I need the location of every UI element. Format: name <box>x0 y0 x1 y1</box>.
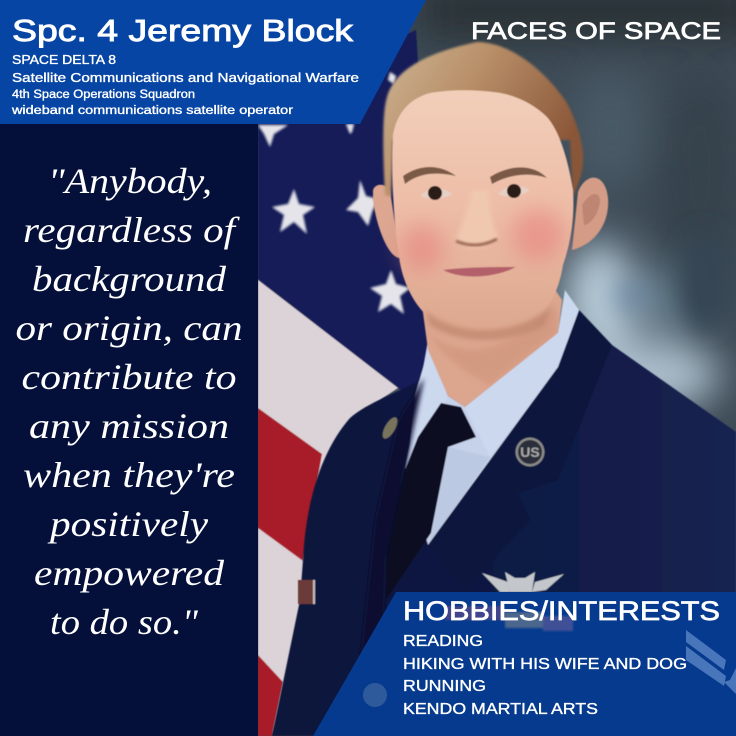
chin shadow <box>425 305 552 340</box>
quote text <box>16 161 242 642</box>
quote text: any mission <box>29 406 229 446</box>
quote text: "Anybody, <box>48 161 212 201</box>
unit details: SPACE DELTA 8 <box>12 53 116 67</box>
eyebrows <box>403 167 456 184</box>
eyes <box>420 188 452 199</box>
portrait: airman in service dress <box>272 42 736 736</box>
panel: quote <box>0 124 258 736</box>
name heading: Spc. 4 Jeremy Block <box>12 13 354 48</box>
hobbies list: RUNNING <box>403 678 486 695</box>
faded ribbon rack <box>445 606 573 631</box>
hobbies heading: HOBBIES/INTERESTS <box>403 596 720 626</box>
faded rank star <box>724 668 736 694</box>
flag stars <box>258 72 410 314</box>
quote text: or origin, can <box>16 308 242 348</box>
quote text: positively <box>47 504 208 544</box>
hobbies list: HIKING WITH HIS WIFE AND DOG <box>403 656 687 673</box>
cheeks <box>400 209 564 272</box>
quote text: empowered <box>34 553 225 593</box>
hair <box>383 42 583 197</box>
collar brass <box>516 438 544 466</box>
faded jacket button <box>363 683 387 707</box>
name tag <box>298 580 315 604</box>
hobbies list <box>403 633 687 718</box>
uniform jacket <box>272 310 736 736</box>
silver wings badge <box>482 572 564 592</box>
unit details: Satellite Communications and Navigational Warfare <box>12 71 359 85</box>
series title: FACES OF SPACE <box>471 18 721 45</box>
American flag <box>258 30 440 736</box>
ears <box>373 185 400 258</box>
mouth <box>443 267 516 276</box>
quote text: background <box>32 259 227 299</box>
nose <box>456 193 498 244</box>
quote text: contribute to <box>22 357 236 397</box>
neck <box>420 285 562 407</box>
quote text: when they're <box>23 455 235 495</box>
panel: hobbies and interests <box>313 592 736 736</box>
unit details <box>11 53 359 117</box>
quote text: regardless of <box>23 210 241 250</box>
jacket lapel <box>428 310 612 546</box>
lapel pin <box>382 416 398 440</box>
hobbies list: KENDO MARTIAL ARTS <box>403 701 598 718</box>
shirt <box>404 290 580 546</box>
quote text: to do so." <box>50 602 199 642</box>
unit details: 4th Space Operations Squadron <box>12 89 195 101</box>
necktie <box>386 403 476 600</box>
collar brass: US <box>520 444 540 460</box>
photo backdrop <box>258 0 736 736</box>
unit details: wideband communications satellite operator <box>11 105 293 117</box>
face <box>392 90 573 332</box>
faded rank chevrons <box>686 630 726 686</box>
shirt collar <box>408 310 580 462</box>
hobbies list: READING <box>403 633 483 650</box>
panel: name header <box>0 0 426 124</box>
